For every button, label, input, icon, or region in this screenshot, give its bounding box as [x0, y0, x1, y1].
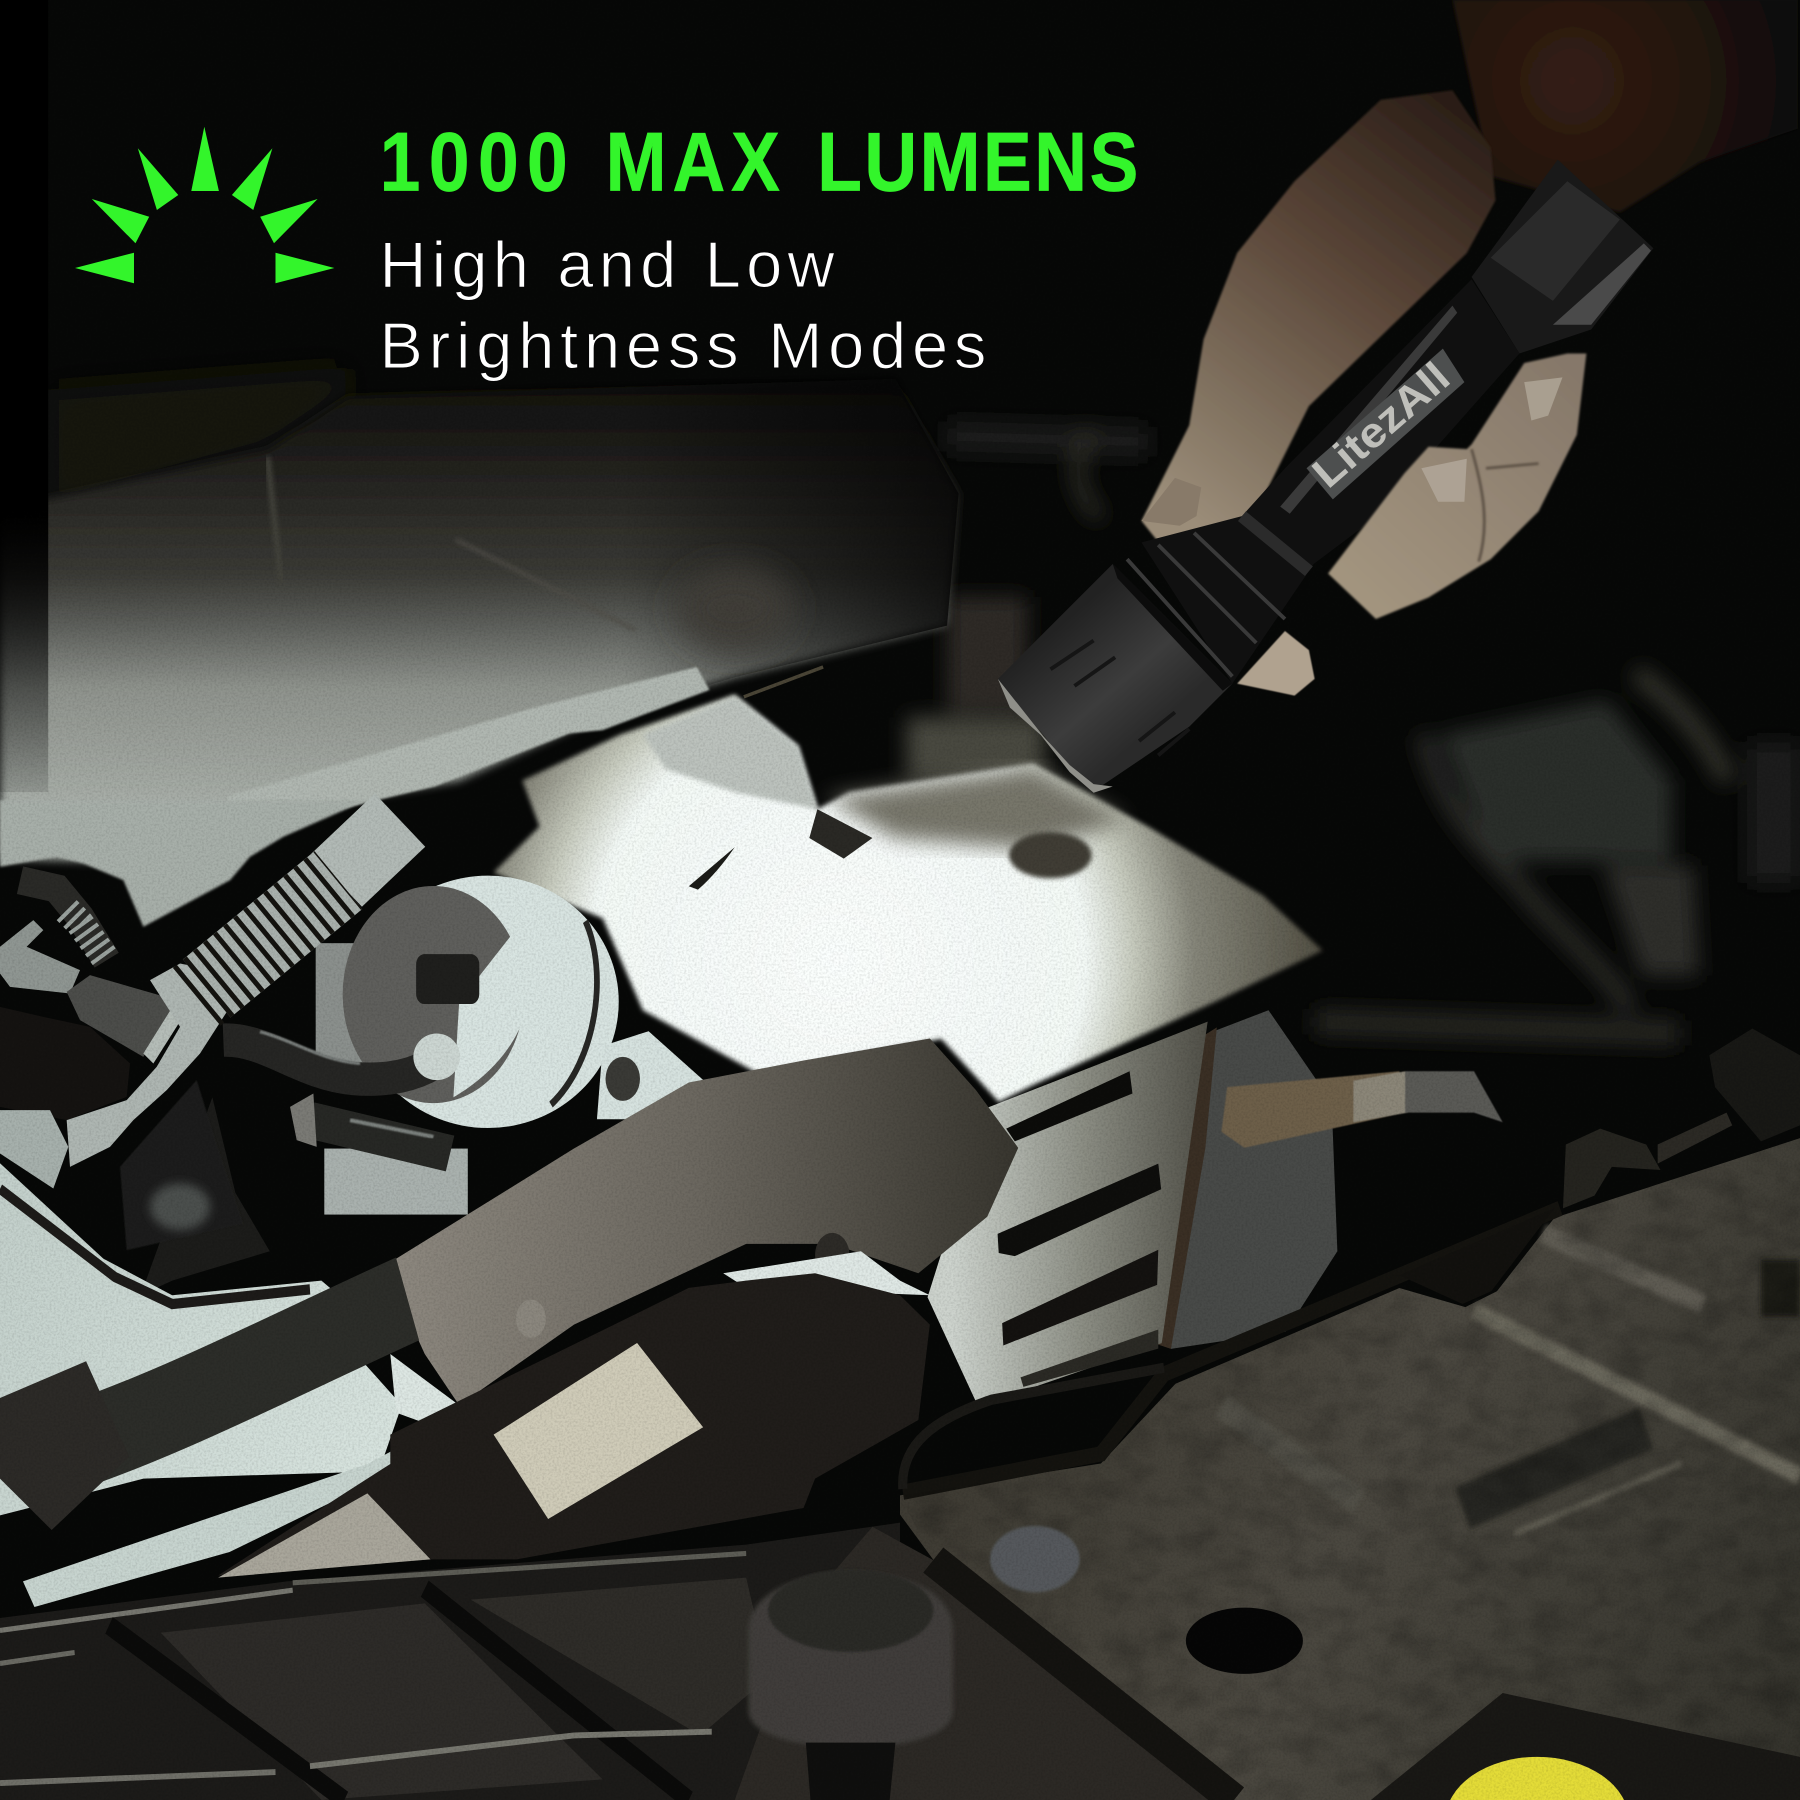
upper engine cover: [0, 367, 959, 863]
cover boundary band: [933, 1560, 1234, 1800]
casting groove: [0, 1189, 310, 1304]
flashlight tail cap: [1472, 160, 1653, 353]
dark rail: [903, 1208, 1560, 1492]
left engine casting and alternator: [0, 876, 706, 1607]
corrugated wire loom: [20, 880, 107, 960]
lower fingers: [1328, 353, 1586, 619]
head bezel highlight: [998, 679, 1113, 793]
heat wrap: [385, 1039, 1018, 1405]
flashlight ribbed neck: [1127, 533, 1285, 676]
icon: brightness rays: [75, 127, 334, 283]
dark body under connector: [0, 1007, 130, 1120]
dark blurred engine parts on the right: [907, 430, 1800, 1033]
mid dark ribbed panel right of cap: [735, 1527, 1234, 1800]
lower pale band: [23, 1427, 436, 1607]
palm and thumb: [1141, 90, 1496, 547]
heading: 1000 max lumens: LUMENS: [817, 115, 1141, 209]
tube label: [494, 1343, 703, 1519]
fingernails: [1524, 377, 1562, 420]
left hoses and connector: [0, 800, 460, 1250]
silver cover lip: [0, 800, 367, 927]
latch clip: [1563, 1129, 1661, 1208]
cover ribs: [0, 1590, 293, 1630]
corrugated hose: [337, 820, 400, 880]
bright heat shield: [494, 695, 1322, 1102]
hose collar: [0, 1361, 129, 1530]
corrugated ribs: [197, 880, 338, 997]
pale left block: [0, 1110, 68, 1189]
connector plate: [0, 920, 80, 993]
plug bump: [990, 1526, 1080, 1592]
hose clamp: [290, 1093, 317, 1147]
finger creases: [1472, 449, 1539, 562]
dusty mottling on lower cover: [920, 1180, 1800, 1784]
flashlight body: [1141, 279, 1519, 684]
louvered heat plate and cylinder: [928, 1010, 1503, 1406]
small rubber hose: [223, 1040, 447, 1079]
flashlight head: [998, 564, 1232, 791]
dark cast body: [141, 1097, 270, 1295]
silver hose neck: [67, 963, 230, 1167]
lower right dusty cover: [900, 1028, 1800, 1800]
silver tube end: [218, 1493, 430, 1578]
logo plate with text: LitezAll: [1303, 353, 1459, 497]
hoses and tube at lower centre: [0, 1039, 1018, 1800]
hole: [1186, 1608, 1303, 1674]
forearm: [1452, 0, 1798, 212]
front dark cover: [0, 1523, 900, 1800]
heading: 1000 max lumens: 1000: [380, 115, 605, 209]
shield details: [643, 697, 1125, 890]
alternator disc: [343, 886, 524, 1103]
cover details: bump, hole, filler cap: [990, 1526, 1800, 1800]
pale engine casting: [0, 1163, 402, 1515]
pale lower part behind hoses: [324, 1149, 468, 1215]
white parts below wrap: [723, 1251, 930, 1295]
left edge strip overlay: [0, 0, 48, 792]
under hose: [310, 1120, 450, 1153]
disc center: [416, 954, 479, 1004]
rubber hose: [75, 1299, 408, 1446]
forearm and hand with flashlight: [998, 0, 1798, 793]
connector tip: [143, 1000, 185, 1063]
pale hose tip: [413, 1033, 460, 1080]
wire loop: [903, 1368, 1164, 1489]
rubber cap: [748, 1569, 953, 1800]
black tube: [218, 1273, 930, 1575]
black cast body with highlight: [120, 1080, 243, 1250]
dark ribbed clip: [1709, 1028, 1800, 1141]
connector block: [67, 975, 177, 1057]
fingertip below head: [1237, 631, 1315, 696]
lattice patch: [316, 943, 367, 1068]
subheading line two: Brightness Modes: [380, 309, 986, 382]
textured panel: [161, 1603, 603, 1800]
bracket: [597, 1031, 706, 1119]
yellow cap: [1445, 1757, 1629, 1800]
subheading line one: High and Low: [380, 228, 836, 301]
wrap fittings: [516, 1300, 546, 1338]
heading: 1000 max lumens: MAX: [606, 115, 812, 209]
alternator body: [357, 876, 619, 1128]
black collar: [1371, 1693, 1800, 1800]
head ridges: [1051, 641, 1189, 755]
